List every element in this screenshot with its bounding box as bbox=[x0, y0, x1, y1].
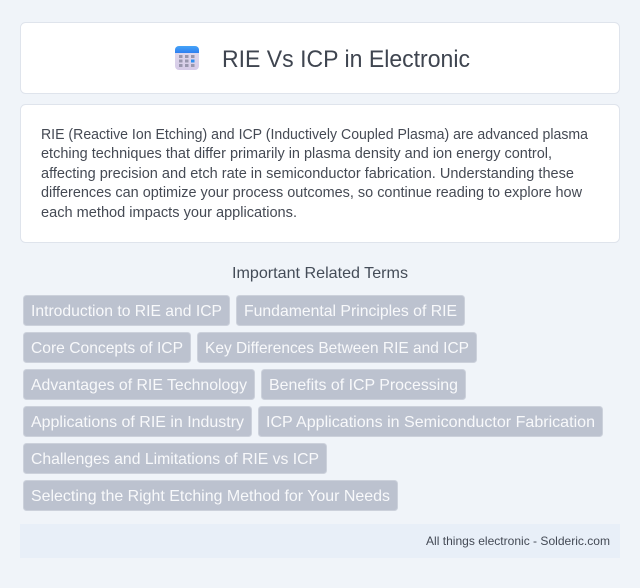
footer text: All things electronic - Solderic.com bbox=[426, 534, 610, 548]
tag: Fundamental Principles of RIE bbox=[244, 303, 457, 320]
tag: Advantages of RIE Technology bbox=[31, 377, 247, 394]
tag: ICP Applications in Semiconductor Fabrication bbox=[266, 414, 595, 431]
tag bbox=[24, 480, 398, 510]
text block: description: etching techniques that differ primarily in plasma density and ion energy control, bbox=[41, 145, 552, 162]
tag bbox=[236, 296, 464, 326]
tag: Applications of RIE in Industry bbox=[31, 414, 244, 431]
tag: Benefits of ICP Processing bbox=[269, 377, 458, 394]
tag bbox=[24, 406, 252, 436]
panel: footer bbox=[20, 524, 620, 558]
text block: description: RIE (Reactive Ion Etching) and ICP (Inductively Coupled Plasma) are advanced plasma bbox=[41, 126, 589, 143]
tag bbox=[262, 370, 466, 400]
tag: Introduction to RIE and ICP bbox=[31, 303, 222, 320]
tag: Selecting the Right Etching Method for Your Needs bbox=[31, 488, 390, 505]
panel: header bbox=[20, 22, 620, 94]
tag bbox=[258, 406, 602, 436]
tag: Challenges and Limitations of RIE vs ICP bbox=[31, 451, 319, 468]
icon: calendar bbox=[175, 46, 199, 70]
panel: description bbox=[20, 104, 620, 242]
tag: Core Concepts of ICP bbox=[31, 340, 183, 357]
text block: description: each method impacts your applications. bbox=[41, 204, 297, 221]
tag bbox=[24, 296, 230, 326]
tag bbox=[24, 370, 254, 400]
tag list: related terms bbox=[24, 296, 602, 510]
text block: description: differences can optimize your process outcomes, so continue reading to explore how bbox=[41, 184, 582, 201]
tag bbox=[24, 444, 326, 474]
tag bbox=[198, 332, 476, 362]
tag bbox=[24, 332, 190, 362]
heading: related terms: Important Related Terms bbox=[232, 265, 408, 282]
text block: description: affecting precision and etch rate in semiconductor fabrication. Understanding these bbox=[41, 165, 574, 182]
tag: Key Differences Between RIE and ICP bbox=[205, 340, 469, 357]
title: RIE Vs ICP in Electronic bbox=[222, 46, 470, 73]
text block: description bbox=[41, 126, 589, 221]
